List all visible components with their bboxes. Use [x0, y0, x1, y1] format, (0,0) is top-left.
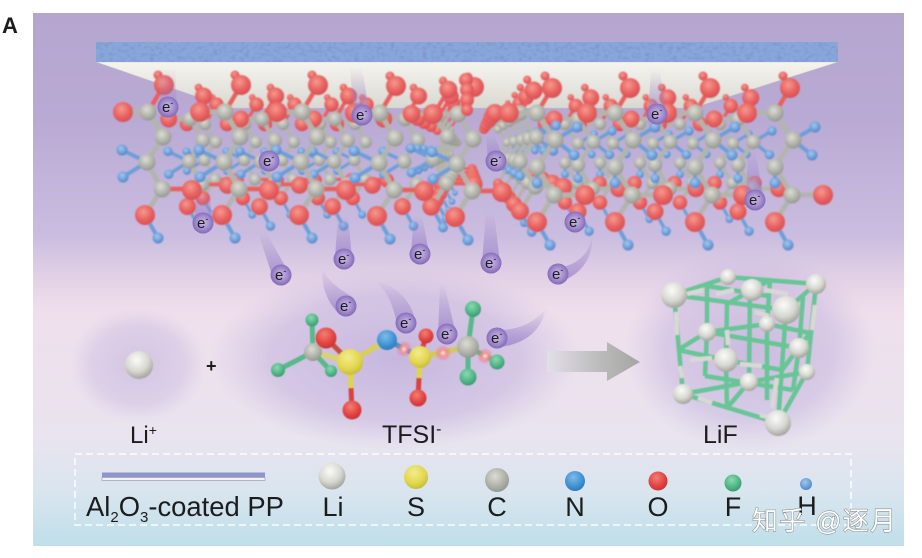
electrons: e: [356, 107, 364, 124]
legend: Al2O3-coated PP: [86, 472, 284, 526]
electrons: -: [364, 106, 367, 116]
Li+ ion: [125, 351, 153, 379]
legend: C: [485, 468, 509, 522]
electrons: e: [651, 106, 659, 123]
electrons: -: [170, 98, 173, 108]
label: TFSI-: -: [436, 421, 442, 438]
electrons: e: [491, 330, 499, 347]
plus sign: +: [206, 356, 217, 376]
legend: Al2O3-coated PP: 2: [110, 509, 119, 526]
electrons: e: [552, 266, 560, 283]
electrons: -: [346, 250, 349, 260]
watermark: 知乎 @逐月: [752, 506, 896, 536]
legend: S: S: [407, 492, 425, 522]
legend: Li: [318, 462, 346, 522]
electrons: -: [560, 265, 563, 275]
electrons: -: [577, 213, 580, 223]
label: Li+: +: [149, 422, 157, 438]
electrons: -: [205, 214, 208, 224]
electrons: e: [340, 298, 348, 315]
glow behind TFSI-: [210, 266, 580, 450]
electron tails: [160, 68, 764, 347]
electrons: e: [275, 267, 283, 284]
glow behind LiF: [625, 248, 875, 452]
electrons: e: [414, 246, 422, 263]
electrons: -: [348, 297, 351, 307]
legend: Al2O3-coated PP: O: [119, 491, 140, 522]
legend: H: [797, 478, 817, 521]
electrons: -: [408, 314, 411, 324]
arrow: [547, 342, 640, 381]
electrons: e: [263, 153, 271, 170]
electrons: e: [441, 326, 449, 343]
legend: Al2O3-coated PP: Al: [86, 491, 110, 522]
electrons: -: [493, 254, 496, 264]
electrons: e: [162, 99, 170, 116]
electrons: e: [490, 153, 498, 170]
electrons: e: [485, 255, 493, 272]
electrons: e: [338, 251, 346, 268]
legend: F: [724, 474, 742, 522]
legend: Al2O3-coated PP: -coated PP: [148, 491, 284, 522]
glow behind Li+: [70, 307, 206, 423]
electrons: -: [499, 329, 502, 339]
electrons: -: [659, 105, 662, 115]
legend: C: C: [487, 492, 507, 522]
legend: N: N: [565, 492, 585, 522]
legend box: [75, 454, 851, 525]
electrons: -: [422, 245, 425, 255]
electrons: e: [197, 215, 205, 232]
label: Li+: Li: [130, 422, 149, 449]
electrode: blue coated layer: [96, 42, 838, 62]
legend: S: [404, 465, 428, 522]
legend: O: [647, 472, 669, 522]
wedge below electrode: [96, 62, 838, 108]
label: LiF: LiF: [703, 421, 738, 449]
electrons: -: [283, 266, 286, 276]
electrons: -: [498, 152, 501, 162]
TFSI- molecule: [271, 301, 504, 420]
legend: N: [565, 471, 585, 522]
legend: F: F: [725, 492, 741, 522]
panel letter: A: [2, 13, 18, 38]
label: TFSI-: TFSI: [382, 421, 436, 449]
centre red stack: [459, 73, 474, 116]
LiF crystal lattice: [661, 269, 826, 436]
electrons: -: [271, 152, 274, 162]
front chains: [113, 70, 833, 250]
electrons: e: [569, 214, 577, 231]
legend: Li: Li: [322, 492, 344, 522]
electrons: [158, 96, 766, 348]
electrons: e: [400, 315, 408, 332]
legend: Al2O3-coated PP: 3: [140, 509, 148, 526]
legend: H: H: [797, 491, 817, 521]
molecular chains on separator: [113, 70, 833, 250]
electrons: -: [757, 191, 760, 201]
back chains right: [479, 76, 787, 237]
electrons: e: [749, 192, 757, 209]
legend: O: O: [647, 492, 669, 522]
electrons: -: [449, 325, 452, 335]
back chains left: [160, 77, 483, 232]
